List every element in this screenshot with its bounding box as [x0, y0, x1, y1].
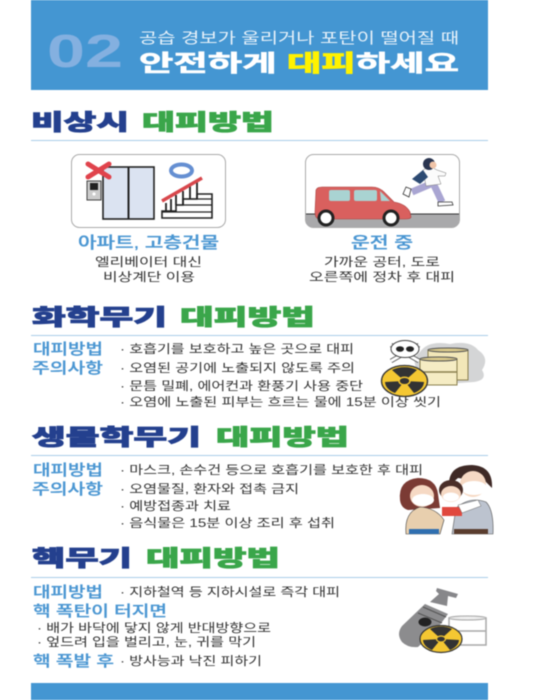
road — [306, 214, 459, 227]
chemical labels — [32, 341, 103, 377]
text: driving instructions: 가까운 공터, 도로 — [324, 255, 440, 269]
icon: red car — [315, 187, 411, 225]
text: driving instructions — [309, 255, 455, 284]
icon: chemical hazard illustration — [382, 340, 485, 396]
radiation sign — [382, 366, 428, 396]
heading: biological weapons — [32, 425, 349, 450]
icon: elevator button panel — [87, 181, 101, 200]
text: apartment instructions: 비상계단 이용 — [103, 270, 195, 284]
nuclear instructions — [37, 585, 340, 668]
skull and bones — [391, 340, 419, 361]
icon: masked family — [400, 465, 493, 534]
nuclear labels — [33, 584, 167, 670]
biological labels: 대피방법 — [33, 462, 103, 479]
biological instructions: · 마스크, 손수건 등으로 호흡기를 보호한 후 대피 — [120, 463, 423, 477]
bomb — [399, 588, 458, 647]
heading: nuclear weapons: 대피방법 — [146, 546, 280, 571]
nuclear labels: 핵 폭발 후 — [33, 653, 114, 670]
heading: emergency evacuation — [31, 110, 274, 135]
chemical instructions — [120, 342, 441, 409]
nuclear labels: 대피방법 — [33, 584, 103, 601]
heading: emergency evacuation: 비상시 — [31, 110, 129, 135]
barrel — [449, 616, 486, 645]
radiation sign — [420, 626, 462, 652]
back barrel — [428, 348, 468, 380]
heading: biological weapons: 생물학무기 — [32, 425, 201, 450]
label: apartment: 아파트, 고층건물 — [78, 234, 219, 252]
front barrel — [420, 357, 457, 385]
man — [449, 465, 493, 534]
icon: red X — [88, 164, 109, 177]
nuclear instructions: · 지하철역 등 지하시설로 즉각 대피 — [120, 585, 340, 599]
chemical labels: 주의사항 — [32, 360, 103, 377]
icon: blue O — [171, 164, 192, 176]
heading: chemical weapons: 화학무기 — [32, 305, 167, 330]
header banner — [31, 0, 488, 90]
chemical instructions: · 호흡기를 보호하고 높은 곳으로 대피 — [120, 342, 354, 356]
chemical labels: 대피방법 — [33, 341, 103, 358]
woman — [400, 478, 444, 534]
heading: nuclear weapons — [32, 546, 280, 571]
nuclear instructions: · 방사능과 낙진 피하기 — [120, 654, 262, 668]
panel: driving icon card — [306, 154, 460, 228]
heading: nuclear weapons: 핵무기 — [32, 546, 132, 571]
biological instructions: · 음식물은 15분 이상 조리 후 섭취 — [120, 516, 335, 530]
child — [439, 480, 481, 516]
icon: nuclear bomb illustration — [399, 588, 486, 652]
header subtitle: 공습 경보가 울리거나 포탄이 떨어질 때 — [139, 30, 459, 47]
chemical instructions: · 문틈 밀폐, 에어컨과 환풍기 사용 중단 — [120, 379, 363, 393]
heading: chemical weapons — [32, 305, 315, 330]
nuclear labels: 핵 폭탄이 터지면 — [33, 603, 167, 620]
footer band — [31, 683, 488, 700]
header title: 안전하게 대피 하세요 — [139, 50, 459, 76]
panel: apartment icon card — [72, 154, 226, 228]
biological instructions — [120, 463, 423, 530]
heading: chemical weapons: 대피방법 — [180, 305, 315, 330]
text: driving instructions: 오른쪽에 정차 후 대피 — [309, 270, 455, 284]
icon: stairs with railing — [162, 178, 212, 218]
icon: elevator doors — [103, 167, 154, 219]
section number: 02 — [47, 25, 123, 77]
text: apartment instructions — [95, 255, 202, 284]
heading: emergency evacuation: 대피방법 — [142, 110, 274, 135]
heading: biological weapons: 대피방법 — [216, 425, 349, 450]
smoke — [415, 343, 485, 385]
biological instructions: · 예방접종과 치료 — [120, 499, 231, 513]
text: apartment instructions: 엘리베이터 대신 — [95, 255, 202, 269]
label: driving: 운전 중 — [351, 234, 413, 252]
biological labels — [32, 462, 103, 498]
icon: running person — [403, 158, 453, 206]
nuclear instructions: · 배가 바닥에 닿지 않게 반대방향으로 — [37, 621, 271, 635]
chemical instructions: · 오염된 공기에 노출되지 않도록 주의 — [120, 361, 355, 375]
chemical instructions: · 오염에 노출된 피부는 흐르는 물에 15분 이상 씻기 — [120, 395, 441, 409]
biological labels: 주의사항 — [32, 481, 103, 498]
biological instructions: · 오염물질, 환자와 접촉 금지 — [120, 482, 299, 496]
nuclear instructions: · 엎드려 입을 벌리고, 눈, 귀를 막기 — [37, 635, 256, 649]
